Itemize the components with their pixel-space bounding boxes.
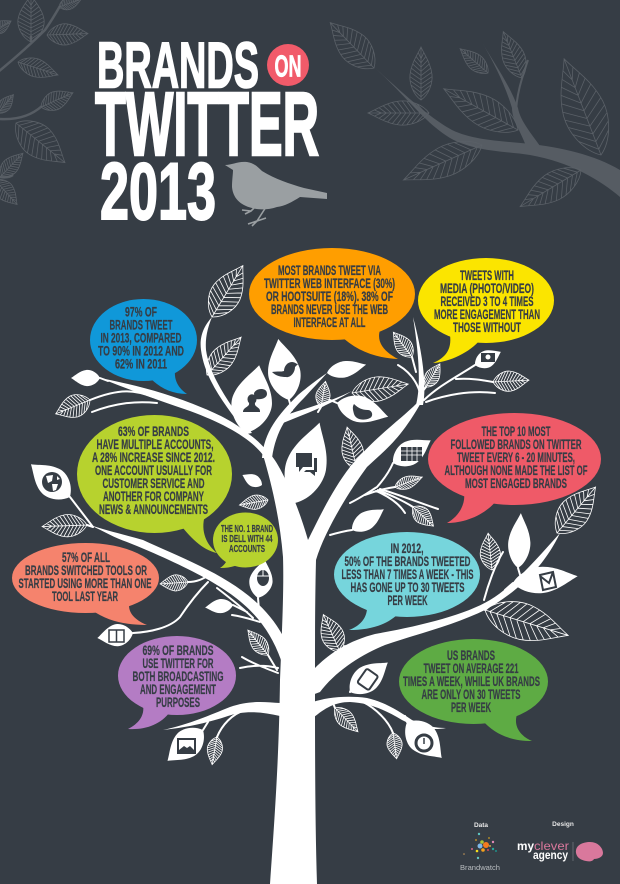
limb: bottom right — [313, 697, 446, 729]
speech bubble: salmon, tools: TOOL LAST YEAR — [52, 589, 118, 604]
speech bubble: lime, multiple accounts — [77, 415, 232, 553]
icon leaf: globe — [21, 453, 80, 509]
speech bubble: lime, multiple accounts: CUSTOMER SERVICE AND — [102, 476, 205, 491]
icon leaf: tablet — [342, 652, 396, 702]
speech bubble: yellow, media tweets: MEDIA (PHOTO/VIDEO) — [440, 281, 534, 296]
speech bubble: orange, web interface: MOST BRANDS TWEET VIA — [278, 263, 381, 278]
speech bubble: green, US vs UK: TWEET ON AVERAGE 221 — [424, 661, 519, 676]
logo: brain — [576, 842, 603, 861]
icon leaf: speech bubbles — [276, 417, 339, 509]
speech bubble: teal, tweet frequency: 50% OF THE BRANDS TWEETED — [344, 554, 471, 569]
speech bubble: blue, 97% of brands — [90, 299, 197, 394]
limb: centre twig — [280, 391, 352, 423]
speech bubble: orange, web interface — [249, 248, 415, 359]
limb: upper right stem — [413, 317, 424, 405]
credit: design, my clever agency: Design — [552, 821, 574, 828]
title: TWITTER — [95, 75, 319, 175]
speech bubble: blue, 97% of brands: IN 2013, COMPARED — [100, 330, 182, 346]
speech bubble: teal, tweet frequency: PER WEEK — [388, 593, 428, 608]
credit: data, Brandwatch: Brandwatch — [460, 863, 500, 872]
solid leaves — [71, 357, 532, 614]
credit: design, my clever agency: agency — [533, 848, 568, 862]
limb: centre branches — [262, 373, 327, 458]
speech bubble: green, US vs UK — [399, 639, 548, 741]
speech bubble: teal, tweet frequency: LESS THAN 7 TIMES A WEEK - THIS — [342, 567, 474, 582]
icon leaf: twitter bird — [262, 336, 305, 403]
speech bubble: purple, broadcasting: 69% OF BRANDS — [142, 643, 214, 658]
trunk and main forks — [100, 378, 422, 884]
speech bubble: teal, tweet frequency — [334, 532, 480, 630]
vein leaves — [42, 258, 607, 766]
credit: design, my clever agency — [517, 821, 603, 862]
title: BRANDS — [97, 28, 259, 102]
title: 2013 — [100, 147, 216, 237]
speech bubble: green, US vs UK: ARE ONLY ON 30 TWEETS — [422, 687, 520, 702]
speech bubble: orange, web interface: TWITTER WEB INTERFACE (30%) — [264, 276, 395, 291]
logo: Brandwatch dots — [463, 833, 497, 859]
speech bubble: teal, tweet frequency: IN 2012, — [390, 541, 424, 556]
speech bubble: small lime, Dell — [213, 512, 278, 568]
title: ON — [274, 48, 302, 84]
speech bubble: small lime, Dell: THE NO. 1 BRAND — [221, 523, 273, 535]
speech bubble: orange, web interface: INTERFACE AT ALL — [294, 315, 366, 330]
icon leaf: camera — [471, 344, 505, 373]
icon: bird — [225, 162, 327, 226]
title — [95, 28, 319, 237]
icon leaf: calendar — [387, 430, 437, 473]
speech bubble: lime, multiple accounts: A 28% INCREASE SINCE 2012. — [92, 450, 215, 465]
speech bubble: orange, web interface: OR HOOTSUITE (18%). 38% OF — [266, 289, 393, 304]
icon leaf: picture — [158, 719, 212, 772]
limb: top left stem — [201, 317, 252, 434]
speech bubble: salmon, tools: BRANDS SWITCHED TOOLS OR — [25, 563, 147, 578]
background branches: top left — [0, 0, 88, 211]
icon leaf: person and speech — [226, 361, 279, 437]
speech bubble: orange, web interface: BRANDS NEVER USE THE WEB — [271, 302, 388, 317]
icon leaf: mail — [512, 563, 579, 596]
icon leaf: film — [96, 622, 135, 649]
speech bubble: blue, 97% of brands: 62% IN 2011 — [115, 356, 167, 372]
tree — [21, 258, 607, 884]
limb: lower right — [312, 533, 560, 695]
speech bubble: purple, broadcasting — [118, 636, 236, 729]
speech bubble: salmon, tools: STARTED USING MORE THAN ONE — [18, 576, 152, 591]
icon leaf: whale — [334, 390, 392, 429]
speech bubble: salmon, tools: 57% OF ALL — [62, 550, 110, 565]
speech bubble: lime, multiple accounts: ONE ACCOUNT USUALLY FOR — [95, 463, 212, 478]
credit: design, my clever agency: my — [517, 839, 534, 853]
speech bubble: salmon, tools — [12, 543, 159, 625]
limb: lower left — [90, 525, 285, 660]
credit: design, my clever agency: clever — [534, 839, 569, 853]
speech bubble: blue, 97% of brands: BRANDS TWEET — [110, 318, 173, 332]
speech bubble: small lime, Dell: ACCOUNTS — [229, 543, 265, 555]
speech bubble: blue, 97% of brands: TO 90% IN 2012 AND — [98, 344, 184, 358]
icon leaf: clock — [396, 711, 453, 769]
speech bubble: lime, multiple accounts: ANOTHER FOR COMPANY — [103, 489, 204, 504]
speech bubble: small lime, Dell: IS DELL WITH 44 — [222, 533, 273, 545]
speech bubble: red, top 10 brands — [428, 413, 601, 523]
speech bubble: lime, multiple accounts: NEWS & ANNOUNCEMENTS — [99, 502, 208, 517]
speech bubble: purple, broadcasting: USE TWITTER FOR — [142, 656, 214, 671]
speech bubble: green, US vs UK: PER WEEK — [451, 700, 491, 715]
speech bubble: yellow, media tweets: RECEIVED 3 TO 4 TIMES — [440, 294, 534, 309]
speech bubble: lime, multiple accounts: 63% OF BRANDS — [118, 424, 189, 439]
twigs — [70, 357, 521, 737]
speech bubble: teal, tweet frequency: HAS GONE UP TO 30 TWEETS — [350, 580, 464, 595]
speech bubble: yellow, media tweets: THOSE WITHOUT — [453, 320, 521, 335]
credit: data, Brandwatch: Data — [474, 822, 488, 829]
speech bubble: lime, multiple accounts: HAVE MULTIPLE ACCOUNTS, — [96, 437, 214, 452]
speech bubble: purple, broadcasting: PURPOSES — [156, 695, 200, 710]
speech bubble: yellow, media tweets: MORE ENGAGEMENT THAN — [434, 307, 540, 322]
background branch: top right — [319, 12, 620, 219]
speech bubble: purple, broadcasting: BOTH BROADCASTING — [132, 669, 224, 684]
limb: bottom left — [163, 702, 280, 730]
speech bubble: yellow, media tweets: TWEETS WITH — [460, 268, 514, 283]
speech bubble: green, US vs UK: US BRANDS — [447, 648, 495, 663]
icon leaf: mouse — [247, 558, 276, 600]
speech bubble: purple, broadcasting: AND ENGAGEMENT — [140, 682, 216, 697]
credit: data, Brandwatch — [460, 822, 500, 872]
speech bubble: blue, 97% of brands: 97% OF — [125, 304, 157, 320]
speech bubble: red, top 10 brands: THE TOP 10 MOST — [482, 424, 551, 439]
speech bubble: yellow, media tweets — [418, 258, 554, 363]
